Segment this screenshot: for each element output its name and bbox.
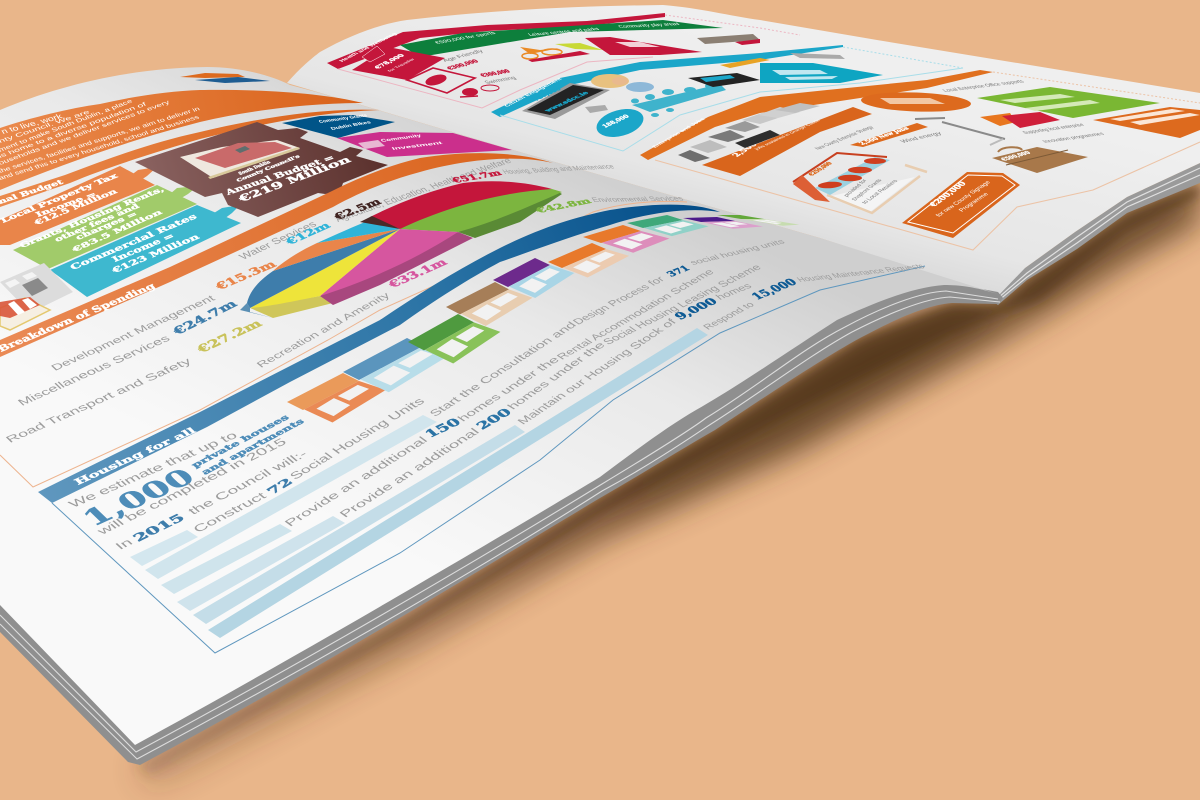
panel: enterprise and jobs [640, 70, 1200, 250]
house row [287, 214, 807, 424]
heading band: health and wellbeing [327, 13, 665, 69]
text: rental accommodation scheme: Rental Accommodation Scheme [554, 267, 717, 361]
icon: black screen [688, 73, 760, 87]
side of pie [250, 296, 333, 318]
text: social housing leasing scheme: Social Housing Leasing Scheme [600, 262, 764, 346]
house: purple and pink [683, 217, 768, 229]
box: grants, rents and fees: Grants, Housing Rents, [17, 185, 167, 250]
text: introduction [0, 98, 202, 181]
text: puzzle and bars notes: Supporting local enterprise [1021, 123, 1086, 135]
text: introduction: n to live, work [0, 112, 65, 136]
orange bars panel [1093, 107, 1200, 138]
chart labels: €24.7m [169, 298, 241, 338]
chart labels: Development Management [49, 293, 219, 373]
icon: bicycle [520, 43, 603, 62]
chart labels: Agriculture, Education, Health and Welfare [333, 156, 514, 224]
tag: new county signage programme: Programme [958, 192, 990, 213]
box: commercial rates: Income = [110, 232, 177, 264]
icon: monitor with web visits: 737,000 [531, 87, 563, 102]
red box with home icon [352, 46, 445, 80]
ellipse: orange callout [861, 91, 971, 113]
house: orange [287, 371, 391, 424]
heading band: citizen engagement [491, 45, 843, 117]
box: commercial rates [50, 205, 241, 297]
chart labels: Miscellaneous Services [15, 333, 173, 408]
text: housing maintenance requests: Housing Maintenance Requests [795, 263, 927, 284]
box: commercial rates: Commercial Rates [68, 212, 199, 272]
box: community (magenta): Community [380, 134, 423, 143]
text: start consultation [427, 238, 787, 418]
icon: council building [180, 140, 300, 179]
icon: wind turbine [915, 118, 1005, 145]
house: tan [446, 280, 537, 327]
panel: breakdown of spending [0, 153, 687, 487]
text: rental accommodation scheme: homes under the [455, 354, 562, 423]
green panel [400, 20, 723, 57]
box: local property tax: Local Property Tax [0, 172, 119, 224]
logo on left page [180, 73, 270, 83]
heading band: citizen engagement: Citizen Engagement [503, 77, 564, 108]
text: in 2015 council commitments: the Council will:- [185, 448, 310, 517]
panel: annual budget [0, 110, 512, 297]
text: wellbeing notes: €300,000 [444, 58, 481, 71]
panel: annual budget total: South Dublin [238, 160, 272, 176]
tag: new county signage programme: €200,000 [927, 181, 969, 209]
heading band: enterprise and jobs [640, 70, 993, 160]
box: community (magenta): Investment [391, 141, 444, 151]
icon: phone circle: 188,000 [600, 113, 631, 129]
panel: annual budget total: €219 Million [235, 154, 353, 205]
box: local property tax: €12.5 Million [31, 187, 119, 227]
heading band: breakdown of spending [0, 153, 553, 357]
green panel [977, 87, 1160, 118]
icon: monitor with web visits: www.sdcc.ie [542, 91, 591, 113]
box: community grants (blue) [282, 113, 395, 138]
house: green [408, 312, 505, 365]
chart labels: €2.5m [330, 196, 384, 222]
house: green and pale [717, 215, 807, 226]
box: local property tax [0, 166, 157, 245]
text: housing stock [514, 281, 755, 426]
text: in 2015 council commitments [112, 448, 310, 552]
text: social housing leasing scheme: homes under the [504, 340, 608, 411]
text: social housing leasing scheme: Provide an additional [337, 426, 482, 520]
box: grants, rents and fees: charges = [73, 210, 139, 241]
right page stack edges [985, 163, 1200, 305]
text: housing maintenance requests [701, 263, 927, 331]
text: wellbeing notes: €300,000 [478, 68, 512, 78]
panel: annual budget total: Annual Budget = [222, 153, 337, 198]
book shadow on table [135, 183, 1200, 790]
icon: red person [460, 85, 499, 97]
slices [370, 181, 552, 229]
heading band: annual budget [0, 110, 380, 207]
orange people banner [702, 107, 872, 176]
chart labels: €15.3m [212, 259, 279, 292]
heading band: housing for all: Housing for all [72, 426, 199, 487]
box: commercial rates: €123 Million [109, 232, 202, 276]
text: introduction: ouseholds and we deliver services to every [0, 99, 172, 166]
box: community grants (blue): Dublin Bikes [330, 120, 372, 131]
heading band: health and wellbeing: Health and Wellbeing [338, 32, 399, 63]
box: grants, rents and fees: other fees and [52, 202, 141, 243]
left page [0, 67, 998, 745]
chart labels: €42.8m [533, 197, 594, 215]
panel: annual budget total [135, 122, 388, 217]
text: housing stock: Maintain our Housing Stock of [514, 316, 679, 426]
text: social housing leasing scheme [337, 262, 764, 520]
chart labels: Road Transport and Safety [3, 356, 195, 445]
chart labels: Water Services [237, 219, 319, 262]
icon: cyan people row [631, 83, 726, 117]
text: private housing estimate: 1,000 [76, 463, 202, 531]
icon: shopfront: provided for [843, 178, 869, 198]
orange people banner: jobs sustained in Grange Castle [753, 119, 822, 151]
chart labels: €51.7m [449, 169, 504, 185]
chart labels [3, 156, 685, 445]
icon: shopfront: to Local Retailers [861, 179, 900, 205]
text: private housing estimate: will be completed in 2015 [93, 436, 289, 537]
text: social housing leasing scheme: 200 [474, 407, 515, 432]
cyan text panel [760, 63, 883, 83]
house: orange and peach [548, 241, 633, 278]
tag: new county signage programme [902, 172, 1020, 238]
box: local property tax: Income = [33, 190, 98, 218]
box: community grants (blue): Community Grants [318, 113, 369, 124]
text: construct 72 units: Social Housing Units [287, 395, 428, 482]
text: start consultation: 371 [664, 264, 693, 279]
icon: silhouette crowd [678, 103, 820, 162]
text: construct 72 units [190, 395, 428, 535]
text: wellbeing notes: Age Friendly [441, 49, 486, 63]
panel: citizen engagement [491, 45, 963, 151]
icon: monitor with web visits [522, 83, 610, 119]
icon: shopfront [793, 153, 927, 213]
red box with home icon: €78,000 [372, 53, 407, 70]
text: rental accommodation scheme [282, 267, 717, 529]
green panel: Community play areas [617, 22, 681, 29]
icon: phone circle [593, 104, 647, 142]
text: private housing estimate: and apartments [199, 417, 307, 477]
chart labels: €12m [282, 220, 333, 247]
panel: introduction swoosh [0, 90, 363, 190]
house: blue [343, 335, 455, 394]
text: private housing estimate [66, 413, 307, 537]
box: grants, rents and fees: €83.5 Million [69, 208, 164, 254]
icon: shopfront: Shopfront Grants [851, 178, 884, 202]
text: in 2015 council commitments: In [112, 536, 135, 552]
text: housing stock: homes [713, 281, 755, 302]
text: start consultation: Start the Consultation and [427, 320, 579, 418]
left page stack edges [0, 282, 1003, 765]
icon: shopfront: €250,000 [806, 161, 834, 177]
orange people banner: 2,500 [731, 142, 760, 158]
text: rental accommodation scheme: Provide an additional [282, 434, 430, 529]
ribbon: new jobs: 2,500 New Jobs [857, 126, 911, 146]
icon: briefcase: €500,000 [998, 150, 1033, 162]
house: orange and pink [583, 224, 675, 253]
text: wellbeing notes: Swimming [483, 76, 518, 85]
chart labels: €33.1m [385, 256, 450, 290]
chart labels: Housing, Building and Maintenance [501, 163, 616, 175]
tag: new county signage programme: for new County Signage [935, 180, 992, 218]
icon: puzzle [980, 112, 1060, 128]
housing bars [130, 328, 708, 638]
icon: face with headset [591, 74, 654, 92]
text: construct 72 units: 72 [264, 476, 296, 497]
red strip panel [585, 34, 760, 55]
text: housing maintenance requests: 15,000 [748, 276, 800, 302]
text: housing stock: 9,000 [671, 295, 721, 322]
panel: health and wellbeing [327, 13, 800, 108]
text: introduction: and send this to every household, school and business [0, 114, 201, 181]
text: wellbeing notes [441, 49, 518, 85]
heading band: housing for all [38, 205, 720, 503]
text: private housing estimate: private houses [189, 413, 292, 470]
green panel: €590,000 for sports [434, 31, 498, 45]
house: green and teal [627, 214, 713, 236]
text: puzzle and bars notes: Local Enterprise Office supports [941, 79, 1026, 93]
text: start consultation: social housing units [688, 238, 787, 267]
panel: annual budget total: County Council's [236, 154, 301, 183]
text: in 2015 council commitments: 2015 [130, 512, 188, 544]
box: grants, rents and fees [13, 185, 198, 269]
text: housing maintenance requests: Respond to [701, 300, 757, 331]
text: turbine note: Wind energy [899, 131, 944, 144]
box: community (magenta) [337, 132, 512, 157]
text: start consultation: Design Process for [570, 275, 667, 326]
chart labels: Environmental Services [590, 195, 685, 203]
green panel: Leisure centres and parks [527, 27, 601, 37]
text: citizen notes [720, 53, 845, 68]
text: puzzle and bars notes [941, 79, 1106, 144]
chart: 3D spending pie [240, 181, 562, 318]
right page [287, 5, 1200, 296]
heading band: enterprise and jobs: Enterprise and Jobs [651, 118, 707, 149]
text: rental accommodation scheme: 150 [422, 416, 465, 440]
text: introduction: the services, facilities and supports, we aim to deliver in [0, 106, 202, 174]
icon: briefcase [992, 147, 1088, 173]
red box with home icon: for Traveller [386, 58, 417, 73]
text: grange castle note: New County Enterprise Strategy [814, 125, 876, 151]
chart labels: Recreation and Amenity [254, 291, 393, 370]
text: construct 72 units: Construct [190, 490, 269, 535]
house: purple [493, 256, 579, 299]
panel: housing for all [38, 205, 927, 653]
text: introduction: is home to a diverse population of [0, 101, 148, 159]
text: puzzle and bars notes: Innovation programmes [1041, 132, 1106, 144]
text: introduction: ment to make South Dublin, a place [0, 98, 135, 153]
chart labels: €27.2m [193, 318, 266, 356]
text: private housing estimate: We estimate that up to [66, 429, 240, 510]
icon: shopfront illustration [0, 263, 73, 330]
icon: exercise stretcher [407, 68, 475, 93]
